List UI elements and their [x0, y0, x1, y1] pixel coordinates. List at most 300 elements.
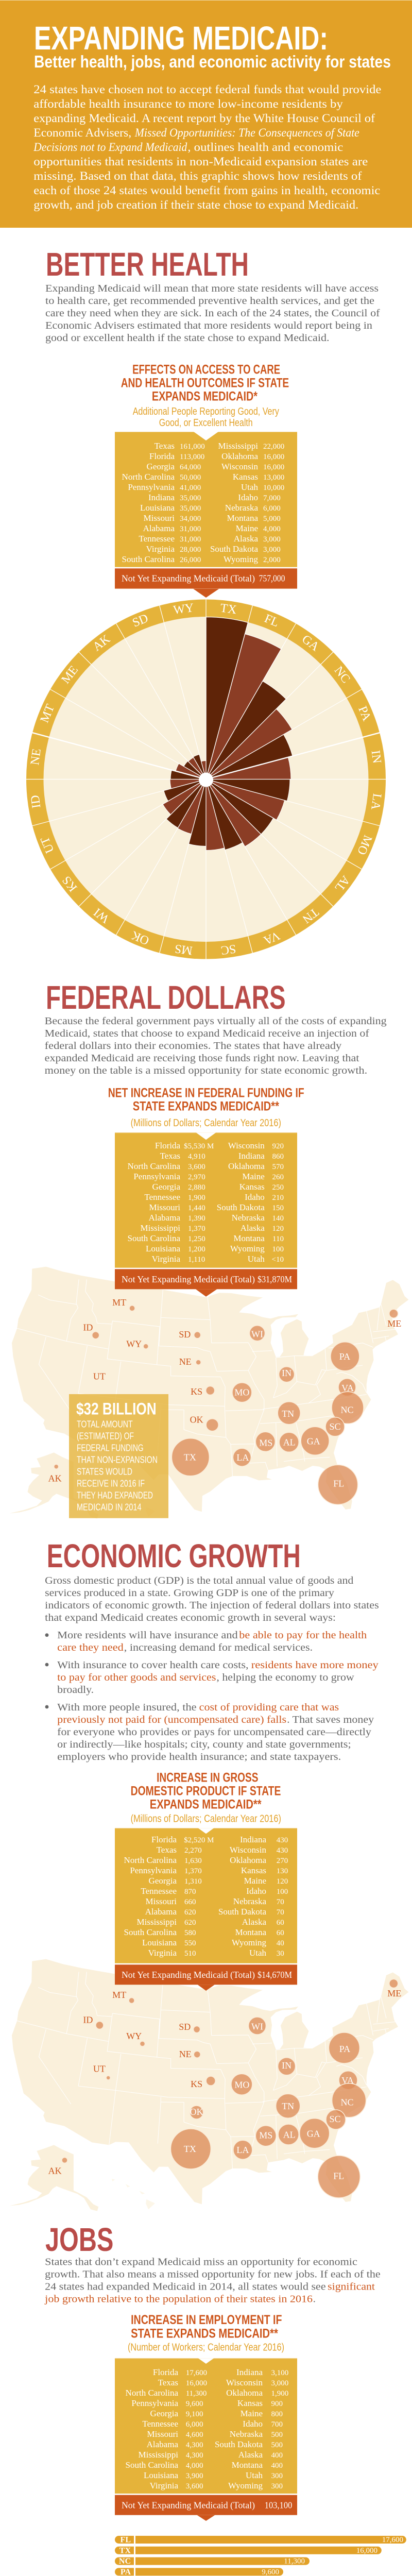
bullet list: cost of providing care that was [199, 1702, 339, 1713]
table panel: GDP: Georgia [149, 1876, 177, 1886]
table panel: federal funding: Wyoming [230, 1244, 265, 1253]
callout: $32 billion: THEY HAD EXPANDED [77, 1490, 153, 1500]
table panel: health outcomes: 4,000 [263, 525, 281, 533]
ring state labels [28, 601, 384, 957]
table panel: employment: 400 [271, 2462, 283, 2470]
table panel: federal funding: Virginia [152, 1254, 180, 1264]
text: federal dollars intro: Medicaid, states that choose to expand Medicaid receive an injection of [45, 1028, 369, 1039]
table panel: health outcomes: 7,000 [263, 494, 281, 502]
table panel: federal funding: Louisiana [146, 1244, 180, 1253]
table panel: GDP: Alaska [242, 1917, 266, 1927]
table panel: GDP [115, 1828, 297, 1963]
map: federal funding bubbles [9, 1267, 408, 1519]
bullet list: broadly. [57, 1684, 94, 1696]
table panel: employment: South Dakota [215, 2439, 263, 2449]
map: federal funding bubbles: VA [341, 1383, 354, 1393]
table panel: federal funding: 570 [272, 1163, 284, 1171]
ring state labels: TN [300, 905, 321, 926]
map: GDP bubbles: GA [307, 2128, 320, 2139]
table panel: health outcomes: Texas [154, 441, 175, 451]
table panel: employment: Alabama [147, 2439, 178, 2449]
table panel: federal funding: 3,600 [188, 1163, 205, 1171]
callout: $32 billion: FEDERAL FUNDING [77, 1443, 144, 1453]
ring state labels: LA [368, 792, 384, 811]
chart title: effects on access to care: AND HEALTH OUTCOMES IF STATE [121, 376, 289, 390]
table panel: health outcomes: Montana [227, 513, 258, 523]
table panel: employment: 6,000 [186, 2420, 203, 2429]
chart title: net increase in federal funding: NET INCREASE IN FEDERAL FUNDING IF [108, 1086, 304, 1100]
table panel: federal funding: 120 [272, 1225, 284, 1233]
table panel: health outcomes: 22,000 [263, 443, 284, 451]
table panel: health outcomes: 6,000 [263, 504, 281, 513]
table panel: GDP: 1,630 [184, 1857, 202, 1865]
chart title: increase in employment: STATE EXPANDS MEDICAID** [131, 2326, 278, 2341]
table panel: federal funding: South Dakota [217, 1202, 265, 1212]
table panel: employment: 1,900 [271, 2389, 288, 2398]
table panel: employment: Wyoming [228, 2481, 263, 2490]
heading: economic growth: ECONOMIC GROWTH [47, 1537, 301, 1574]
bullet list: With insurance to cover health care costs, [57, 1659, 249, 1671]
table panel: health outcomes: Alaska [234, 534, 258, 544]
table panel: employment: 17,600 [186, 2369, 207, 2377]
chart title: effects on access to care: EFFECTS ON ACCESS TO CARE [132, 362, 280, 377]
table panel: health outcomes: 28,000 [180, 546, 201, 554]
text: federal dollars intro [45, 1015, 387, 1076]
table panel: employment: Kansas [237, 2398, 263, 2408]
callout: $32 billion: TOTAL AMOUNT [77, 1419, 133, 1430]
ring state labels: NE [28, 748, 44, 766]
table panel: federal funding: $5,530 M [184, 1142, 214, 1150]
bar chart: jobs by state: NC [119, 2557, 131, 2566]
table panel: health outcomes: Utah [241, 482, 258, 492]
map: federal funding bubbles: NE [179, 1357, 192, 1367]
table panel: health outcomes: 64,000 [180, 463, 201, 471]
table panel: GDP: 1,310 [184, 1877, 202, 1886]
table panel: employment: 3,000 [271, 2379, 288, 2387]
bar chart: jobs by state: FL [121, 2536, 131, 2544]
chart title: increase in employment [128, 2313, 284, 2353]
bullet list: care they need [57, 1642, 124, 1653]
table panel: health outcomes: 26,000 [180, 556, 201, 564]
table panel: federal funding: Utah [248, 1254, 265, 1264]
table panel: employment: 300 [271, 2482, 283, 2490]
table panel: federal funding: Tennessee [144, 1192, 180, 1202]
text: economic growth intro: that expand Medicaid creates economic growth in several ways: [45, 1612, 336, 1623]
table panel: health outcomes: 50,000 [180, 473, 201, 482]
table panel: health outcomes: South Carolina [122, 554, 175, 564]
text: better health intro: Expanding Medicaid will mean that more state residents will have access [45, 283, 379, 294]
table panel: health outcomes: 113,000 [180, 453, 204, 461]
table panel: health outcomes: North Carolina [122, 472, 175, 482]
map: federal funding bubbles: AL [283, 1437, 296, 1447]
table panel: health outcomes [115, 432, 297, 567]
chart title: net increase in federal funding [108, 1086, 304, 1129]
text: jobs intro: 24 states had expanded Medicaid in 2014, all states would see [45, 2281, 326, 2293]
table panel: employment: 700 [271, 2420, 283, 2429]
table panel: employment: South Carolina [126, 2460, 178, 2470]
text: federal dollars intro: federal dollars into their economies. The states that have already [45, 1040, 342, 1052]
table panel: employment: Maine [241, 2409, 263, 2418]
table panel: federal funding: 150 [272, 1204, 284, 1212]
map: GDP bubbles: FL [333, 2171, 344, 2181]
table panel: health outcomes: Wisconsin [221, 462, 258, 471]
intro text: growth, and job creation if their state chose to expand Medicaid. [33, 198, 358, 211]
table panel: health outcomes: 2,000 [263, 556, 281, 564]
table panel: employment: Indiana [236, 2367, 263, 2377]
bullet list: With more people insured, the [57, 1702, 197, 1713]
map: GDP bubbles [9, 1959, 408, 2211]
table panel: health outcomes: Virginia [146, 544, 175, 554]
map: federal funding bubbles: IN [282, 1368, 291, 1378]
table panel: health outcomes: South Dakota [210, 544, 258, 554]
map: federal funding bubbles: MT [112, 1297, 126, 1308]
chart title: increase in GDP: EXPANDS MEDICAID** [150, 1798, 262, 1812]
table panel: GDP: 430 [277, 1836, 288, 1844]
table panel: employment: Georgia [150, 2409, 178, 2418]
table panel: employment: 500 [271, 2431, 283, 2439]
table panel: federal funding: 140 [272, 1214, 284, 1223]
table panel: health outcomes: 31,000 [180, 525, 201, 533]
ring state labels: UT [38, 835, 57, 855]
map: GDP bubbles: KS [191, 2079, 202, 2089]
text: better health intro: Economic Advisers estimated that more residents would report being in [45, 320, 372, 331]
table panel: employment: 900 [271, 2400, 283, 2408]
total bar: federal funding: $31,870M [258, 1274, 292, 1284]
table panel: employment: 500 [271, 2441, 283, 2449]
table panel: federal funding: 1,440 [188, 1204, 205, 1212]
callout: $32 billion: $32 BILLION [76, 1400, 157, 1418]
table panel: health outcomes: Alabama [143, 523, 175, 533]
map: GDP bubbles: WI [251, 2022, 263, 2032]
table panel: federal funding: <10 [272, 1256, 284, 1264]
table panel: federal funding: 100 [272, 1245, 284, 1253]
map: federal funding bubbles: NC [340, 1404, 354, 1415]
map: federal funding bubbles: AK [48, 1473, 62, 1484]
text: federal dollars intro: Because the federal government pays virtually all of the costs of expanding [45, 1015, 387, 1027]
table panel: employment: 3,900 [186, 2472, 203, 2480]
total bar: employment: Not Yet Expanding Medicaid (Total) [122, 2500, 255, 2511]
table panel: federal funding: Kansas [239, 1182, 265, 1192]
table panel: GDP: Virginia [148, 1948, 177, 1958]
table panel: federal funding: Idaho [245, 1192, 265, 1202]
table panel: federal funding: Pennsylvania [133, 1172, 180, 1181]
table panel: GDP: Florida [151, 1835, 177, 1844]
bar chart: jobs by state [115, 2536, 406, 2576]
map: GDP bubbles: LA [236, 2145, 249, 2155]
total bar: federal funding [115, 1269, 297, 1297]
map: federal funding bubbles: GA [307, 1436, 320, 1446]
bar chart: jobs by state: 11,300 [284, 2557, 305, 2566]
ring state labels: ID [28, 794, 43, 809]
table panel: federal funding: Florida [155, 1141, 180, 1150]
bar chart: jobs by state: 17,600 [382, 2536, 403, 2544]
table panel: health outcomes: 13,000 [263, 473, 284, 482]
text: federal dollars intro: money on the table is a missed opportunity for state economic growth. [45, 1065, 367, 1076]
table panel: GDP: Wisconsin [230, 1845, 266, 1855]
ring state labels: NC [332, 664, 353, 686]
table panel: federal funding: Alabama [149, 1213, 180, 1223]
map: federal funding bubbles: SC [329, 1421, 341, 1432]
intro text: opportunities that residents in non-Medicaid expansion states are [33, 155, 368, 168]
map: federal funding bubbles: MS [259, 1437, 272, 1448]
table panel: employment: 4,600 [186, 2431, 203, 2439]
table panel: federal funding: Montana [233, 1233, 265, 1243]
chart title: increase in employment: (Number of Workers; Calendar Year 2016) [128, 2342, 284, 2353]
total bar: GDP: $14,670M [258, 1970, 292, 1980]
table panel: GDP: 60 [277, 1919, 284, 1927]
table panel: GDP: 2,270 [184, 1846, 202, 1855]
ring state labels: SD [130, 612, 150, 630]
callout: $32 billion [69, 1394, 168, 1518]
map: federal funding bubbles: ME [387, 1318, 401, 1329]
map: federal funding bubbles: WY [126, 1338, 142, 1349]
map: federal funding bubbles: MO [234, 1387, 249, 1398]
ring state labels: FL [263, 612, 281, 630]
table panel: employment [115, 2358, 297, 2494]
table panel: employment: Montana [232, 2460, 263, 2470]
table panel: employment: 3,100 [271, 2369, 288, 2377]
table panel: federal funding: Georgia [152, 1182, 180, 1192]
ring state labels: AL [332, 873, 352, 894]
table panel: federal funding: 4,910 [188, 1153, 205, 1161]
map: GDP bubbles: AK [48, 2166, 62, 2176]
table panel: health outcomes: 34,000 [180, 515, 201, 523]
total bar: health outcomes: Not Yet Expanding Medicaid (Total) [122, 573, 255, 584]
bullet list: or indirectly—like hospitals; city, county and state governments; [57, 1739, 351, 1750]
map: GDP bubbles: UT [93, 2064, 106, 2074]
table panel: GDP: Idaho [246, 1886, 266, 1896]
bar chart: jobs by state: 9,600 [262, 2568, 279, 2576]
table panel: federal funding: 920 [272, 1142, 284, 1150]
table panel: federal funding: 1,370 [188, 1225, 205, 1233]
table panel: federal funding: South Carolina [128, 1233, 180, 1243]
total bar: employment: 103,100 [265, 2500, 292, 2510]
intro text: each of those 24 states would benefit from gains in health, economic [33, 184, 380, 197]
table panel: employment: Florida [153, 2367, 178, 2377]
table panel: GDP: 70 [277, 1898, 284, 1906]
table panel: GDP: Oklahoma [230, 1855, 266, 1865]
table panel: GDP: 550 [184, 1939, 196, 1947]
table panel: GDP: South Carolina [124, 1927, 177, 1937]
ring state labels: IN [369, 750, 384, 764]
table panel: employment: 11,300 [186, 2389, 207, 2398]
table panel: employment: 4,000 [186, 2462, 203, 2470]
chart title: net increase in federal funding: (Millions of Dollars; Calendar Year 2016) [131, 1117, 281, 1129]
table panel: federal funding: 210 [272, 1194, 284, 1202]
map: GDP bubbles: ME [387, 1988, 401, 1998]
table panel: GDP: 270 [277, 1857, 288, 1865]
table panel: GDP: South Dakota [218, 1907, 266, 1917]
map: federal funding bubbles: UT [93, 1371, 106, 1382]
map: GDP bubbles: VA [341, 2075, 354, 2086]
table panel: federal funding: 1,900 [188, 1194, 205, 1202]
intro text [33, 83, 381, 211]
chart title: increase in GDP: DOMESTIC PRODUCT IF STATE [131, 1784, 281, 1798]
table panel: GDP: 40 [277, 1939, 284, 1947]
table panel: federal funding: Texas [160, 1151, 180, 1161]
map: federal funding bubbles: TX [184, 1452, 196, 1462]
bullet list: previously not paid for (uncompensated care) falls [57, 1714, 286, 1725]
table panel: GDP: Texas [157, 1845, 177, 1855]
map: federal funding bubbles: OK [190, 1415, 203, 1425]
intro text: Economic Advisers, [33, 126, 131, 139]
table panel: GDP: Tennessee [141, 1886, 177, 1896]
table panel: federal funding: 860 [272, 1153, 284, 1161]
table panel: health outcomes: 16,000 [263, 453, 284, 461]
ring state labels: SC [220, 942, 237, 957]
ring state labels: GA [299, 632, 322, 654]
chart title: increase in GDP: INCREASE IN GROSS [157, 1770, 259, 1785]
map: GDP bubbles: MO [234, 2080, 249, 2090]
map: federal funding bubbles: SD [179, 1329, 191, 1340]
table panel: employment: Texas [158, 2378, 178, 2387]
ring state labels: TX [219, 601, 237, 617]
map: GDP bubbles: SC [329, 2114, 341, 2124]
chart title: increase in GDP: (Millions of Dollars; Calendar Year 2016) [131, 1814, 281, 1825]
table panel: employment: 400 [271, 2451, 283, 2460]
total bar: federal funding: Not Yet Expanding Medicaid (Total) [122, 1274, 255, 1285]
table panel: employment: 3,600 [186, 2482, 203, 2490]
bullet list [45, 1630, 379, 1762]
text: jobs intro: . [313, 2294, 316, 2305]
map: GDP bubbles: NC [340, 2097, 354, 2107]
text: federal dollars intro: expanded Medicaid are receiving those funds right now. Leaving that [45, 1053, 359, 1064]
text: better health intro: to health care, get recommended preventive health services, and get the [45, 295, 374, 307]
table panel: GDP: 620 [184, 1908, 196, 1917]
table panel: GDP: Nebraska [233, 1896, 266, 1906]
map: GDP bubbles: TX [184, 2144, 196, 2154]
callout: $32 billion: THAT NON-EXPANSION [77, 1454, 158, 1465]
table panel: health outcomes: Missouri [144, 513, 175, 523]
bar chart: jobs by state: 16,000 [356, 2547, 377, 2555]
text: jobs intro: significant [328, 2281, 375, 2293]
intro text: missing. Based on that data, this graphic shows how residents of [33, 170, 362, 182]
table panel: employment: Alaska [238, 2450, 263, 2460]
ring state labels: OK [129, 928, 151, 947]
table panel: employment: 4,300 [186, 2441, 203, 2449]
table panel: health outcomes: Indiana [148, 493, 175, 502]
table panel: federal funding: 110 [272, 1235, 284, 1243]
map: GDP bubbles: MT [112, 1990, 126, 2000]
table panel: GDP: Utah [249, 1948, 266, 1958]
table panel: employment: 4,300 [186, 2451, 203, 2460]
map: federal funding bubbles: LA [236, 1452, 249, 1463]
map: GDP bubbles: PA [339, 2044, 350, 2054]
bullet list: for everyone who provides or pays for uncompensated care—directly [57, 1726, 372, 1738]
table panel: federal funding: 2,880 [188, 1183, 205, 1192]
intro text: expanding Medicaid. A recent report by the White House Council of [33, 112, 375, 125]
total bar: health outcomes: 757,000 [259, 573, 285, 584]
chart title: effects on access to care [121, 362, 289, 429]
table panel: health outcomes: 10,000 [263, 484, 284, 492]
table panel: employment: Oklahoma [226, 2388, 263, 2398]
table panel: GDP: Wyoming [232, 1938, 266, 1947]
ring state labels: WY [173, 601, 195, 617]
table panel: federal funding: 1,110 [188, 1256, 205, 1264]
heading: better health: BETTER HEALTH [46, 246, 249, 283]
wedges [162, 617, 295, 853]
intro text: 24 states have chosen not to accept federal funds that would provide [33, 83, 381, 96]
table panel: health outcomes: 35,000 [180, 504, 201, 513]
map: GDP bubbles: AL [283, 2129, 296, 2140]
ring state labels: VA [261, 928, 282, 947]
table panel: health outcomes: Louisiana [140, 503, 175, 513]
table panel: employment: 800 [271, 2410, 283, 2418]
table panel: health outcomes: Maine [236, 523, 258, 533]
table panel: employment: Mississippi [139, 2450, 178, 2460]
table panel: employment: Idaho [243, 2419, 263, 2429]
table panel: employment: Pennsylvania [131, 2398, 178, 2408]
map: federal funding bubbles: WI [251, 1329, 263, 1340]
total bar: GDP: Not Yet Expanding Medicaid (Total) [122, 1970, 255, 1980]
text: economic growth intro [45, 1575, 379, 1623]
ring state labels: MS [174, 941, 193, 957]
text: jobs intro [44, 2257, 381, 2305]
bar chart: jobs by state: TX [119, 2546, 131, 2555]
text: jobs intro: job growth relative to the population of their states in 2016 [44, 2294, 313, 2305]
bullet list: be able to pay for the health [239, 1630, 367, 1641]
bullet list: , helping the economy to grow [216, 1672, 354, 1683]
table panel: GDP: North Carolina [124, 1855, 177, 1865]
table panel: health outcomes: 41,000 [180, 484, 201, 492]
total bar: employment [115, 2495, 297, 2521]
table panel: federal funding: 1,390 [188, 1214, 205, 1223]
table panel: health outcomes: 3,000 [263, 546, 281, 554]
chart title: effects on access to care: Additional People Reporting Good, Very [133, 406, 279, 417]
table panel: employment: Virginia [150, 2481, 178, 2490]
map: GDP bubbles: WY [126, 2031, 142, 2041]
table panel: health outcomes: Mississippi [218, 441, 258, 451]
ring state labels: AK [91, 632, 113, 654]
map: GDP bubbles: TN [282, 2101, 294, 2111]
text: economic growth intro: indicators of economic growth. The injection of federal dollars into states [45, 1600, 379, 1611]
bullet list: employers who provide health insurance; and state taxpayers. [57, 1751, 341, 1762]
bullet list: to pay for other goods and services [57, 1672, 216, 1683]
table panel: federal funding: Nebraska [232, 1213, 265, 1223]
table panel: GDP: Mississippi [137, 1917, 177, 1927]
bullet list: residents have more money [251, 1659, 379, 1671]
heading: jobs: JOBS [45, 2221, 113, 2258]
text: economic growth intro: services produced in a state. Growing GDP is one of the primary [45, 1587, 335, 1599]
table panel: GDP: 70 [277, 1908, 284, 1917]
radial chart: additional people reporting good health by state [26, 600, 386, 959]
table panel: health outcomes: Kansas [233, 472, 258, 482]
table panel: GDP: 430 [277, 1846, 288, 1855]
map: GDP bubbles: OK [190, 2107, 203, 2117]
title: EXPANDING MEDICAID: [34, 20, 328, 57]
callout: $32 billion: STATES WOULD [77, 1466, 132, 1477]
table panel: GDP: 100 [277, 1888, 288, 1896]
table panel: employment: 300 [271, 2472, 283, 2480]
map: federal funding bubbles: KS [191, 1386, 202, 1397]
table panel: federal funding [115, 1132, 297, 1268]
map: GDP bubbles: IN [282, 2060, 291, 2071]
total bar: health outcomes [115, 568, 297, 598]
table panel: health outcomes: Idaho [238, 493, 258, 502]
intro text: Missed Opportunities: The Consequences of State [134, 126, 359, 139]
callout: $32 billion: (ESTIMATED) OF [77, 1431, 134, 1441]
text: economic growth intro: Gross domestic product (GDP) is the total annual value of goods and [45, 1575, 353, 1586]
chart title: increase in GDP [131, 1770, 281, 1825]
table panel: employment: 9,100 [186, 2410, 203, 2418]
table panel: GDP: Louisiana [142, 1938, 177, 1947]
map: GDP bubbles: NE [179, 2049, 192, 2059]
bullet list: , increasing demand for medical services. [124, 1642, 313, 1653]
text: better health intro [45, 283, 380, 344]
ring state labels: MT [38, 702, 57, 725]
table panel: GDP: 620 [184, 1919, 196, 1927]
table panel: federal funding: Mississippi [141, 1223, 180, 1233]
